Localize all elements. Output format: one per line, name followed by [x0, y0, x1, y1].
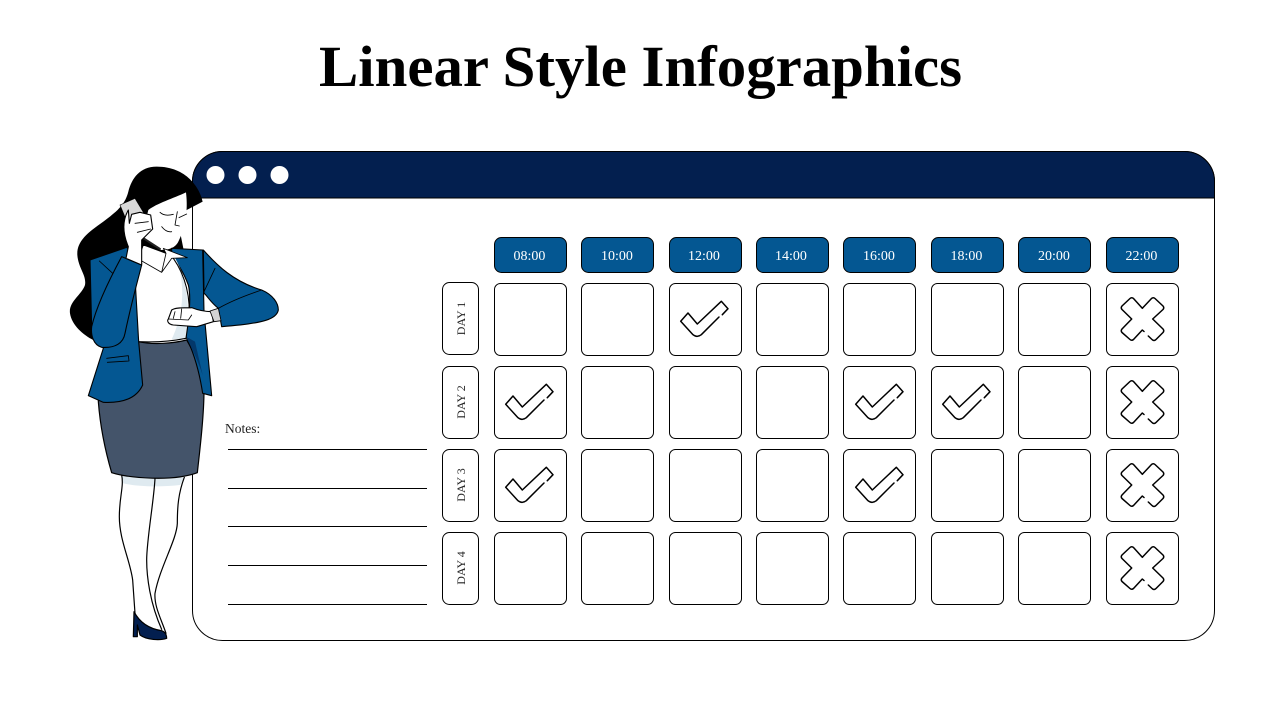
time header row: 08:00: [514, 249, 545, 264]
pocket: [107, 356, 129, 362]
cross: day 3: [1121, 464, 1164, 506]
check: day 1 12:00: [681, 301, 728, 336]
time header row: 10:00: [601, 249, 633, 264]
leg shadow: [122, 475, 184, 486]
phone: [120, 198, 152, 235]
leg outlines: [119, 475, 184, 633]
shirt: [135, 255, 189, 342]
far jacket shadow: [186, 337, 203, 375]
cross: day 4: [1121, 547, 1164, 590]
shirt edge and waist: [139, 258, 189, 342]
time header row: 12:00: [688, 249, 720, 264]
check marks: [506, 301, 990, 502]
finger creases: [168, 309, 192, 320]
shoulder crease: [99, 261, 113, 273]
hair: [70, 167, 203, 340]
hand on phone: [124, 210, 153, 265]
wrist hand: [168, 308, 213, 327]
title: Linear Style Infographics: [319, 34, 962, 99]
neck strap: [143, 238, 160, 249]
face details: [160, 212, 187, 232]
left sleeve: [91, 257, 142, 347]
collar: [138, 245, 187, 272]
check: day 3 08:00: [506, 467, 553, 502]
day labels: DAY 4: [454, 551, 468, 585]
jacket far panel: [172, 248, 212, 396]
right sleeve: [203, 250, 278, 327]
panel: browser window: [192, 152, 1214, 640]
check: day 2 08:00: [506, 384, 553, 419]
legs and skirt: [98, 340, 204, 640]
window dots: [206, 166, 288, 184]
shoe: [133, 612, 167, 640]
time header row: 16:00: [863, 249, 895, 264]
window title bar: [192, 152, 1214, 198]
notes lines: [228, 450, 427, 604]
day labels: DAY 2: [454, 385, 468, 419]
skirt: [98, 340, 204, 478]
watch cuff: [210, 308, 221, 322]
cross: day 1: [1121, 298, 1164, 340]
day labels: DAY 3: [454, 468, 468, 502]
time header row: 18:00: [951, 249, 982, 264]
time header row: 22:00: [1126, 249, 1157, 264]
shirt shadow: [172, 265, 188, 339]
check: day 3 16:00: [856, 467, 903, 502]
time header row: 20:00: [1038, 249, 1070, 264]
time header row: [494, 238, 1178, 272]
day labels: [442, 282, 478, 604]
jacket near panel: [88, 247, 143, 402]
cross marks: [1121, 298, 1164, 590]
face: [142, 192, 187, 250]
check: day 2 18:00: [943, 384, 990, 419]
illustration: woman on phone checking watch: [70, 167, 278, 640]
cross: day 2: [1121, 381, 1164, 424]
day labels: DAY 1: [454, 302, 468, 335]
finger lines: [135, 222, 151, 232]
legs: [119, 475, 184, 633]
schedule grid cells: [494, 284, 1178, 604]
upper body: [70, 167, 278, 402]
sleeve crease: [204, 268, 262, 308]
time header row: 14:00: [775, 249, 807, 264]
notes label: Notes:: [225, 421, 260, 436]
check: day 2 16:00: [856, 384, 903, 419]
